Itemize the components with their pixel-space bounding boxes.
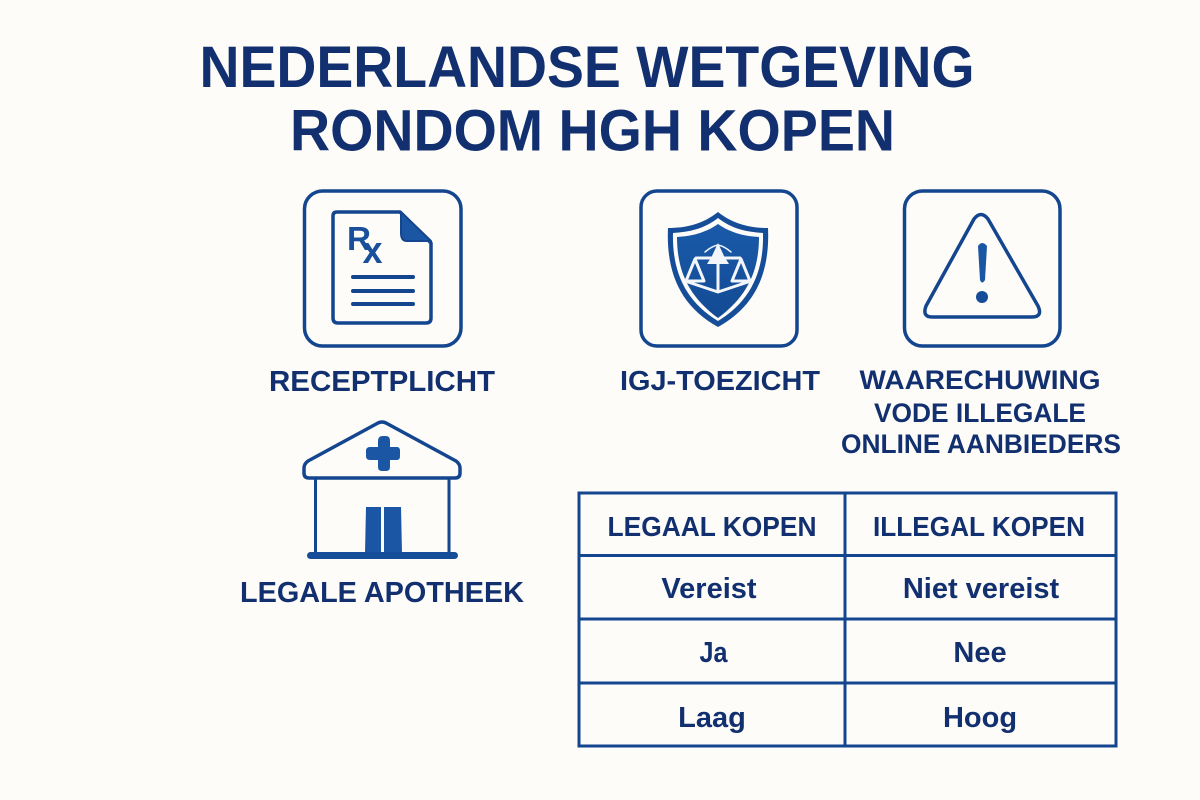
label: waarschuwing xyxy=(841,365,1121,459)
title xyxy=(200,35,974,164)
icon: prescription document: R xyxy=(347,221,371,258)
icon: prescription document xyxy=(304,191,461,346)
comparison table: Nee xyxy=(953,637,1007,669)
label: waarschuwing: VODE ILLEGALE xyxy=(874,398,1086,428)
comparison table: Hoog xyxy=(943,702,1017,734)
title: RONDOM HGH KOPEN xyxy=(290,98,895,164)
comparison table: Laag xyxy=(678,702,746,734)
icon: shield with scales xyxy=(641,191,797,346)
comparison table: Vereist xyxy=(661,573,757,605)
label: receptplicht: RECEPTPLICHT xyxy=(269,366,495,398)
comparison table: ILLEGAL KOPEN xyxy=(873,511,1085,542)
comparison table: LEGAAL KOPEN xyxy=(608,511,816,542)
comparison table xyxy=(579,493,1116,746)
label: waarschuwing: ONLINE AANBIEDERS xyxy=(841,429,1121,459)
comparison table: Niet vereist xyxy=(903,573,1060,605)
icon: prescription document: x xyxy=(362,230,382,272)
icon: warning triangle xyxy=(904,191,1060,346)
icon: pharmacy xyxy=(304,422,460,559)
label: waarschuwing: WAARECHUWING xyxy=(860,365,1100,395)
comparison table: Ja xyxy=(700,637,728,669)
title: NEDERLANDSE WETGEVING xyxy=(200,35,974,100)
label: IGJ-toezicht: IGJ-TOEZICHT xyxy=(620,365,820,396)
label: legale apotheek: LEGALE APOTHEEK xyxy=(240,577,524,609)
